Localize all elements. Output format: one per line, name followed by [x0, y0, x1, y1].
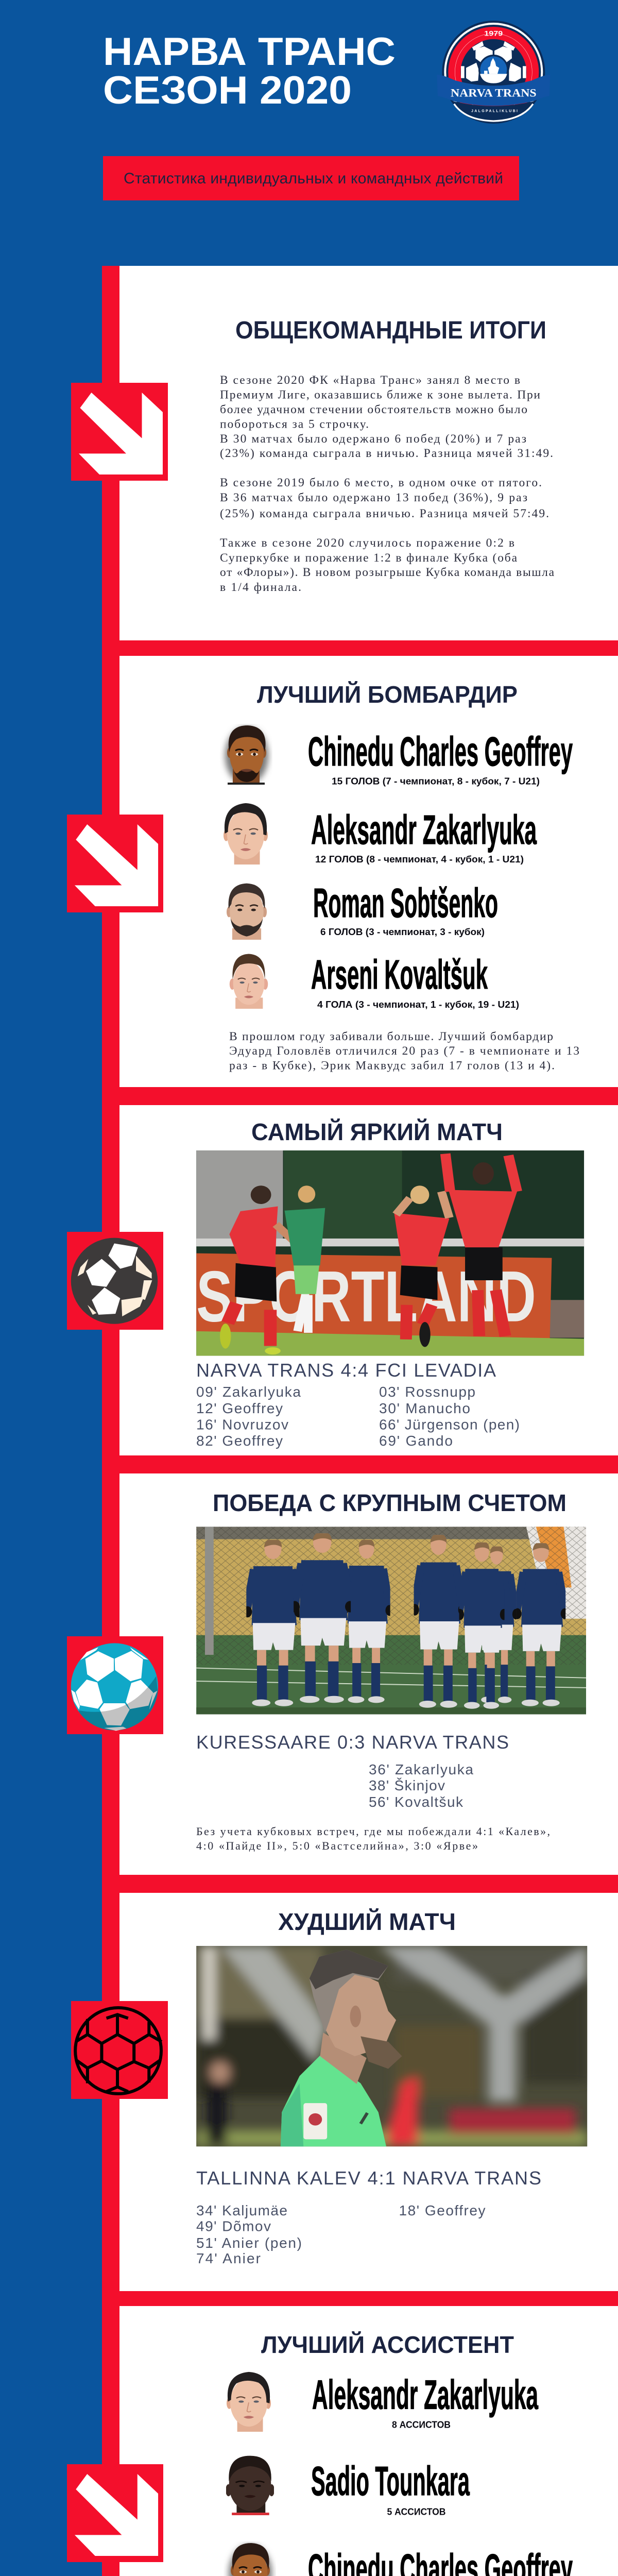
panel: top scorers — [67, 681, 579, 1073]
text block: last season scorers — [229, 1030, 579, 1073]
logo: Narva Trans badge: 1979 — [484, 29, 503, 37]
icon: red arrow — [67, 815, 163, 912]
heading: ПОБЕДА С КРУПНЫМ СЧЕТОМ — [213, 1489, 566, 1516]
text block: season summary: побороться за 5 строчку. — [220, 417, 369, 431]
goal scorers — [369, 1761, 473, 1810]
player: Sobtšenko: 6 ГОЛОВ (3 - чемпионат, 3 - кубок) — [320, 927, 485, 937]
goal scorers: 09' Zakarlyuka — [196, 1384, 301, 1400]
text block: season summary: В сезоне 2019 было 6 место, в одном очке от пятого. — [220, 476, 542, 489]
goal scorers: 34' Kaljumäe — [196, 2202, 287, 2218]
text block: season summary: от «Флоры»). В новом розыгрыше Кубка команда вышла — [220, 566, 555, 579]
text block: season summary — [220, 374, 555, 594]
goal scorers: 49' Dõmov — [196, 2218, 271, 2234]
title: СЕЗОН 2020 — [103, 69, 352, 112]
goal scorers: 82' Geoffrey — [196, 1433, 283, 1449]
text block: season summary: (25%) команда сыграла вничью. Разница мячей 57:49. — [220, 507, 549, 520]
panel: brightest match — [67, 1118, 585, 1449]
match score: KURESSAARE 0:3 NARVA TRANS — [196, 1732, 509, 1753]
text block: last season scorers: Эдуард Головлёв отличился 20 раз (7 - в чемпионате и 13 — [229, 1044, 579, 1058]
player: Geoffrey — [224, 2541, 573, 2576]
player: Geoffrey — [220, 724, 573, 786]
heading: САМЫЙ ЯРКИЙ МАТЧ — [251, 1118, 503, 1145]
text block: season summary: Суперкубке и поражение 1:2 в финале Кубка (оба — [220, 551, 518, 565]
icon: blue football — [67, 1636, 163, 1736]
panel: team results — [71, 317, 555, 594]
match score: NARVA TRANS 4:4 FCI LEVADIA — [196, 1360, 496, 1381]
goal scorers: 69' Gando — [379, 1433, 453, 1449]
logo: Narva Trans badge: NARVA TRANS — [451, 86, 537, 99]
text block: season summary: в 1/4 финала. — [220, 581, 301, 594]
heading: ЛУЧШИЙ БОМБАРДИР — [257, 681, 518, 708]
goal scorers: 12' Geoffrey — [196, 1400, 283, 1416]
subtitle band — [103, 156, 519, 200]
player: Kovaltšuk — [230, 952, 519, 1010]
text block: season summary: (23%) команда сыграла в ничью. Разница мячей 31:49. — [220, 447, 553, 460]
player: Tounkara: Sadio Tounkara — [311, 2458, 470, 2504]
goal scorers: 74' Anier — [196, 2250, 261, 2266]
player: Zakarlyuka — [227, 2372, 538, 2432]
text block: other wins — [196, 1825, 550, 1852]
text block: other wins: Без учета кубковых встреч, где мы побеждали 4:1 «Калев», — [196, 1825, 550, 1838]
player: Geoffrey: 15 ГОЛОВ (7 - чемпионат, 8 - кубок, 7 - U21) — [332, 776, 540, 786]
player: Sobtšenko — [227, 880, 498, 940]
player: Tounkara: 5 АССИСТОВ — [387, 2507, 446, 2517]
player: Kovaltšuk: 4 ГОЛА (3 - чемпионат, 1 - кубок, 19 - U21) — [317, 999, 519, 1010]
goal scorers: 66' Jürgenson (pen) — [379, 1417, 520, 1432]
panel: top assists — [67, 2331, 579, 2576]
text block: last season scorers: раз - в Кубке), Эрик Маквудс забил 17 голов (13 и 4). — [229, 1059, 555, 1073]
match score: TALLINNA KALEV 4:1 NARVA TRANS — [196, 2167, 541, 2189]
goal scorers: 30' Manucho — [379, 1400, 470, 1416]
text block: season summary: Также в сезоне 2020 случилось поражение 0:2 в — [220, 536, 514, 550]
icon: black outline football — [71, 2001, 168, 2099]
subtitle band: Статистика индивидуальных и командных действий — [124, 170, 503, 187]
icon: red arrow — [67, 2464, 163, 2562]
goal scorers: 18' Geoffrey — [399, 2202, 485, 2218]
title — [103, 30, 396, 112]
goal scorers: 36' Zakarlyuka — [369, 1761, 473, 1777]
goal scorers — [196, 2202, 485, 2266]
logo: Narva Trans badge: JALGPALLIKLUBI — [471, 109, 518, 113]
goal scorers — [196, 1384, 520, 1449]
photo: players celebrating — [196, 1150, 585, 1356]
heading: ЛУЧШИЙ АССИСТЕНТ — [261, 2331, 514, 2358]
player: Zakarlyuka: 8 АССИСТОВ — [392, 2419, 451, 2430]
heading: ОБЩЕКОМАНДНЫЕ ИТОГИ — [235, 317, 546, 344]
goal scorers: 51' Anier (pen) — [196, 2235, 302, 2251]
photo: goalkeeper in profile — [196, 1946, 587, 2146]
heading: ХУДШИЙ МАТЧ — [278, 1908, 456, 1935]
logo: Narva Trans badge — [437, 21, 550, 124]
photo: team huddle — [196, 1527, 586, 1714]
icon: red arrow — [71, 383, 168, 481]
text block: season summary: Премиум Лиге, оказавшись ближе к зоне вылета. При — [220, 388, 540, 402]
white content panel — [119, 266, 618, 2576]
title: НАРВА ТРАНС — [103, 30, 396, 74]
goal scorers: 03' Rossnupp — [379, 1384, 475, 1400]
text block: last season scorers: В прошлом году забивали больше. Лучший бомбардир — [229, 1030, 553, 1043]
text block: season summary: В 36 матчах было одержано 13 побед (36%), 9 раз — [220, 491, 527, 504]
goal scorers: 38' Škinjov — [369, 1777, 445, 1793]
icon: dark football — [67, 1232, 163, 1330]
player: Tounkara — [226, 2456, 470, 2517]
player: Zakarlyuka — [224, 803, 537, 865]
text block: other wins: 4:0 «Пайде II», 5:0 «Вастселийна», 3:0 «Ярве» — [196, 1839, 478, 1852]
vertical red timeline — [102, 266, 119, 2576]
goal scorers: 16' Novruzov — [196, 1417, 288, 1432]
panel: worst match — [71, 1908, 587, 2266]
goal scorers: 56' Kovaltšuk — [369, 1794, 464, 1810]
text block: season summary: более удачном стечении обстоятельств можно было — [220, 403, 527, 416]
panel: biggest win — [67, 1489, 586, 1852]
player: Zakarlyuka: 12 ГОЛОВ (8 - чемпионат, 4 - кубок, 1 - U21) — [315, 854, 524, 865]
text block: season summary: В 30 матчах было одержано 6 побед (20%) и 7 раз — [220, 432, 526, 446]
text block: season summary: В сезоне 2020 ФК «Нарва Транс» занял 8 место в — [220, 374, 520, 387]
